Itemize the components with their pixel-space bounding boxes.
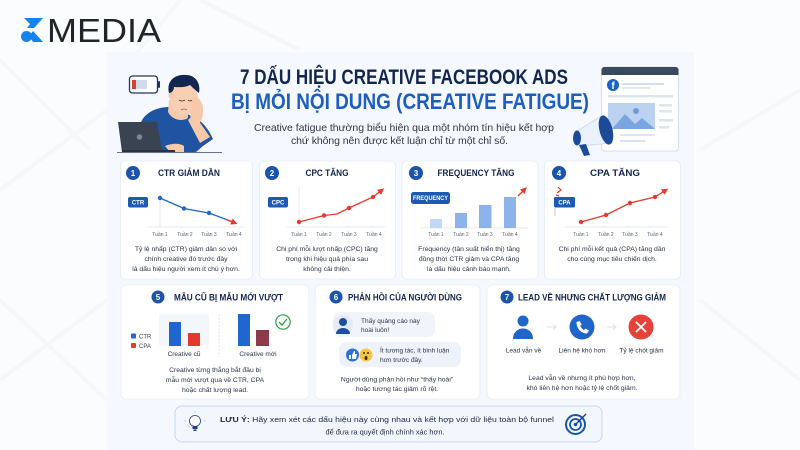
man: [141, 75, 213, 152]
description: Creative từng thắng bắt đầu bị: [169, 365, 261, 374]
description: cho cùng mục tiêu chiến dịch.: [567, 254, 657, 263]
bar chart: creative mới: [238, 314, 277, 358]
legend: CTR: [139, 334, 152, 340]
icon: light bulb: [184, 411, 206, 431]
icon: logo mark: [21, 18, 43, 42]
description: trong khi hiệu quả phía sau: [286, 256, 368, 263]
badge 6: [330, 290, 342, 304]
line chart: CPA: [554, 187, 668, 238]
badge 5: 5: [156, 293, 161, 302]
bar chart: frequency: Tuần 1: [428, 232, 444, 238]
icon: green check: [276, 315, 290, 329]
description: [526, 373, 638, 392]
step: phone: [559, 314, 606, 354]
icon: low battery: [130, 76, 160, 93]
description: chính creative đó trước đây: [144, 256, 228, 263]
line chart: CPA: Tuần 2: [598, 232, 614, 238]
comment bubble 1: hoài luôn!: [361, 327, 389, 334]
line chart: CTR: Tuần 4: [226, 232, 242, 238]
arrow: [607, 324, 616, 330]
legend: CPA: [139, 344, 151, 350]
bar chart: frequency: [411, 189, 528, 238]
bar chart: frequency: FREQUENCY: [413, 196, 448, 202]
line chart: CPA: Tuần 3: [622, 232, 638, 238]
description: hoặc tương tác giảm rõ rệt.: [356, 386, 438, 393]
badge 4: 4: [557, 169, 562, 178]
browser window: f: [611, 81, 615, 92]
icon: megaphone: [573, 114, 616, 156]
line chart: CPC: Tuần 3: [341, 232, 357, 238]
description: [559, 244, 666, 263]
line chart: CTR: [128, 196, 245, 238]
heading: CTR GIẢM DẦN: [158, 167, 220, 179]
line chart: CPC: CPC: [272, 200, 285, 206]
heading: PHẢN HỒI CỦA NGƯỜI DÙNG: [348, 292, 462, 304]
subtitle: [254, 122, 554, 147]
comment bubble 1: [333, 312, 435, 337]
description: khó liên hệ hơn hoặc tỷ lệ chốt giảm.: [526, 383, 638, 392]
comment bubble 1: Thấy quảng cáo này: [361, 316, 421, 325]
illustration: tired man at laptop: [117, 75, 222, 153]
step: phone: Liên hệ khó hơn: [559, 348, 606, 354]
panel: card 3 Frequency: [402, 161, 538, 279]
step: lead: [506, 316, 542, 354]
description: đồng thời CTR giảm và CPA tăng: [419, 254, 519, 263]
subtitle: Creative fatigue thường biểu hiện qua một nhóm tín hiệu kết hợp: [254, 122, 554, 134]
badge 1: 1: [131, 169, 136, 178]
comment bubble 2: hơn trước đây.: [380, 357, 423, 364]
line chart: CPA: Tuần 4: [647, 232, 663, 238]
heading: MẪU CŨ BỊ MẪU MỚI VƯỢT: [174, 292, 283, 304]
arrow: [547, 324, 556, 330]
subtitle: chứ không nên được kết luận chỉ từ một chỉ số.: [291, 135, 508, 147]
line chart: CPA: Tuần 1: [573, 232, 589, 238]
description: [276, 244, 378, 273]
logo: [21, 12, 161, 49]
callout: note: [175, 406, 602, 442]
icon: target: [566, 414, 586, 434]
badge 3: 3: [414, 169, 419, 178]
panel: card 2 CPC: [260, 161, 396, 279]
panel: card 1 CTR: [120, 161, 252, 279]
step: lead: Lead vẫn về: [506, 346, 542, 354]
badge 7: [500, 290, 514, 304]
logo wordmark: MEDIA: [47, 12, 161, 49]
line chart: CPC: [268, 187, 385, 238]
description: mẫu mới vượt qua về CTR, CPA: [166, 375, 265, 384]
legend: [131, 334, 152, 350]
step: closing rate: Tỷ lệ chốt giảm: [619, 346, 664, 354]
heading: FREQUENCY TĂNG: [438, 168, 514, 179]
description: Frequency (tần suất hiển thị) tăng: [418, 244, 520, 253]
bar chart: creative cũ: [159, 314, 209, 358]
badge 7: 7: [505, 293, 510, 302]
description: Người dùng phản hồi như “thấy hoài”: [341, 374, 454, 384]
panel: card 5 old vs new creative: [121, 285, 309, 399]
description: Lead vẫn về nhưng ít phù hợp hơn,: [528, 373, 636, 382]
description: hoặc chất lượng lead.: [182, 385, 248, 394]
note text: [220, 415, 554, 436]
bar chart: creative mới: Creative mới: [239, 351, 277, 358]
line chart: CPC: Tuần 4: [366, 232, 382, 238]
description: [132, 244, 240, 273]
description: [418, 244, 520, 273]
panel: card 4 CPA: [544, 161, 680, 279]
panel: card 6 user feedback: [315, 285, 480, 399]
description: [166, 365, 265, 394]
bar chart: frequency: Tuần 3: [477, 232, 493, 238]
description: là dấu hiệu cảnh báo mạnh.: [427, 264, 511, 273]
description: Chi phí mỗi kết quả (CPA) tăng dần: [559, 244, 666, 253]
line chart: CPA: CPA: [558, 200, 571, 206]
description: Chi phí mỗi lượt nhấp (CPC) tăng: [276, 244, 378, 253]
heading: CPC TĂNG: [306, 168, 348, 179]
line chart: CTR: Tuần 1: [152, 232, 168, 238]
panel: card 7 lead quality: [487, 285, 680, 399]
laptop: [118, 122, 175, 152]
title line 2: BỊ MỎI NỘI DUNG (CREATIVE FATIGUE): [231, 89, 589, 114]
description: không cải thiện.: [303, 266, 351, 273]
illustration: facebook ad and megaphone: [573, 67, 678, 156]
bar chart: frequency: Tuần 2: [453, 232, 469, 238]
line chart: CPC: Tuần 2: [316, 232, 332, 238]
badge 2: 2: [270, 169, 275, 178]
line chart: CTR: CTR: [132, 200, 145, 206]
bar chart: frequency: Tuần 4: [502, 232, 518, 238]
description: là dấu hiệu người xem ít chú ý hơn.: [132, 264, 240, 273]
step: closing rate: [619, 314, 664, 354]
description: Tỷ lệ nhấp (CTR) giảm dần so với: [135, 244, 238, 253]
line chart: CTR: Tuần 3: [201, 232, 217, 238]
comment bubble 2: [339, 342, 461, 367]
bar chart: creative cũ: Creative cũ: [168, 351, 201, 358]
comment bubble 2: Ít tương tác, ít bình luận: [380, 346, 450, 354]
title line 1: 7 DẤU HIỆU CREATIVE FACEBOOK ADS: [240, 65, 568, 89]
badge 6: 6: [334, 293, 339, 302]
note text: LƯU Ý: Hãy xem xét các dấu hiệu này cùng nhau và kết hợp với dữ liệu toàn bộ funnel: [220, 415, 554, 424]
title: [231, 65, 589, 114]
line chart: CPC: Tuần 1: [291, 232, 307, 238]
description: [341, 374, 454, 393]
line chart: CTR: Tuần 2: [177, 232, 193, 238]
heading: LEAD VỀ NHƯNG CHẤT LƯỢNG GIẢM: [518, 292, 666, 304]
badge 5: [152, 290, 164, 304]
note text: để đưa ra quyết định chính xác hơn.: [325, 428, 445, 436]
heading: CPA TĂNG: [590, 168, 640, 179]
